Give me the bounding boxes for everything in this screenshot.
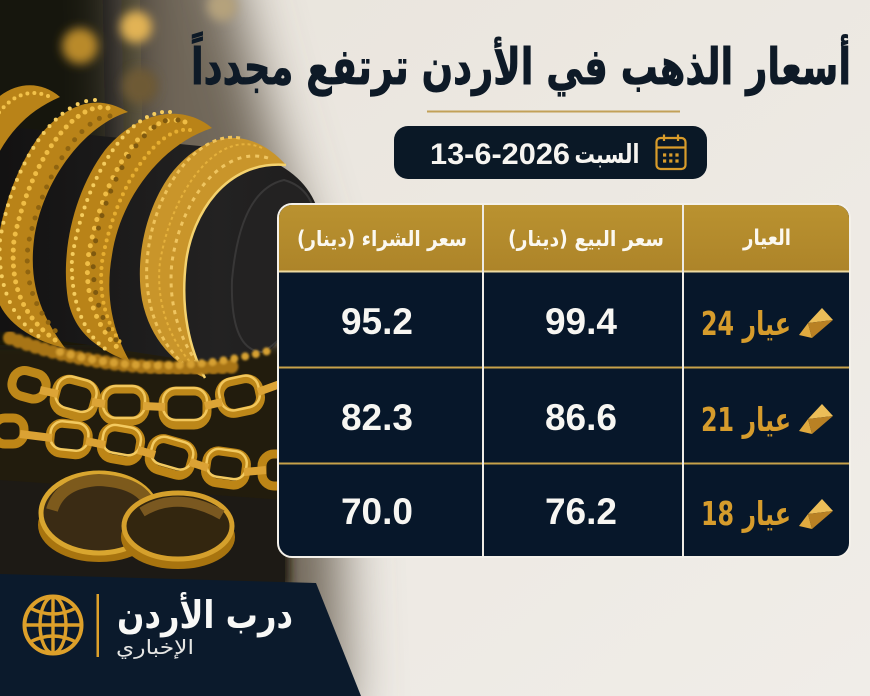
dark table surface xyxy=(0,345,290,588)
date text: 13-6-2026 xyxy=(430,138,570,171)
header rule and row dividers xyxy=(279,270,849,272)
row: karat 18: 70.0 xyxy=(341,491,413,532)
row: karat 24: عيار 24 xyxy=(701,304,791,343)
header: buy price: سعر الشراء (دينار) xyxy=(297,227,467,251)
photo: gold bangles, chains and rings xyxy=(0,0,345,696)
price table xyxy=(278,204,850,557)
brand name: درب الأردن xyxy=(117,591,293,637)
table body xyxy=(278,204,850,557)
row: karat 21: عيار 21 xyxy=(701,400,791,439)
photo backdrop haze xyxy=(0,0,345,696)
bangle 4 xyxy=(140,137,286,378)
weekday: السبت xyxy=(574,140,640,170)
logo divider xyxy=(96,594,99,657)
brand subtitle: الإخباري xyxy=(116,635,194,660)
row: karat 24: 99.4 xyxy=(545,301,617,342)
row: karat 18 xyxy=(341,491,833,533)
footer brand panel xyxy=(0,574,361,696)
bokeh lights xyxy=(62,0,237,104)
upper chain xyxy=(9,368,280,425)
row: karat 21: 82.3 xyxy=(341,397,413,438)
bangle 1 xyxy=(0,85,60,160)
row: karat 18: 76.2 xyxy=(545,491,617,532)
date pill xyxy=(394,126,707,179)
icon: gold bar xyxy=(799,499,833,529)
black cylinder xyxy=(0,125,316,362)
table header xyxy=(279,205,849,271)
row: karat 21: 86.6 xyxy=(545,397,617,438)
icon: gold bar xyxy=(799,404,833,434)
icon: globe xyxy=(24,596,82,654)
icon: gold bar xyxy=(799,308,833,338)
row: karat 21 xyxy=(341,397,833,439)
header: sell price: سعر البيع (دينار) xyxy=(508,227,664,251)
icon: calendar xyxy=(656,134,686,169)
row: karat 18: عيار 18 xyxy=(701,494,791,533)
gold ring right xyxy=(124,493,232,565)
header: karat: العيار xyxy=(742,226,791,251)
row: karat 24 xyxy=(341,301,833,343)
gold ring left xyxy=(41,473,157,558)
title divider xyxy=(427,110,680,112)
row: karat 24: 95.2 xyxy=(341,301,413,342)
bangle 3 xyxy=(66,112,212,362)
blurred beads under bangles xyxy=(10,338,272,368)
bangle 2 xyxy=(0,100,128,348)
lower chain xyxy=(0,418,292,487)
